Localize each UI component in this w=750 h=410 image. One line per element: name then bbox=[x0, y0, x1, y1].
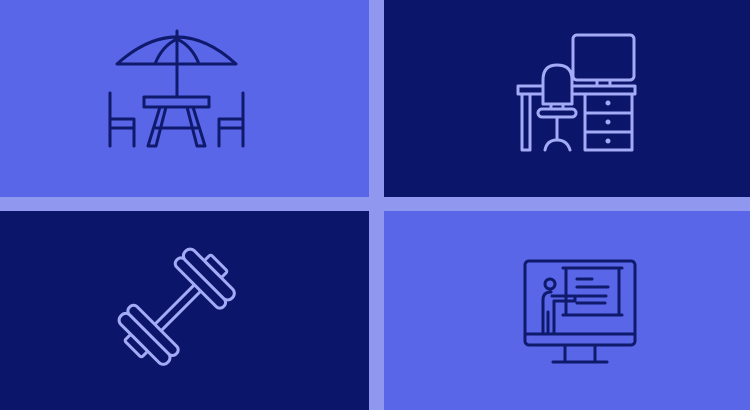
panel: outdoor table bbox=[0, 0, 369, 197]
icon: computer with presenter bbox=[525, 261, 635, 362]
panel: desk bbox=[384, 0, 750, 197]
panel: online teaching bbox=[384, 211, 750, 410]
icon: desk with chair and monitor bbox=[518, 35, 635, 150]
panel: dumbbell bbox=[0, 211, 369, 410]
icon: umbrella table bbox=[110, 31, 243, 146]
icon: dumbbell bbox=[110, 240, 243, 373]
